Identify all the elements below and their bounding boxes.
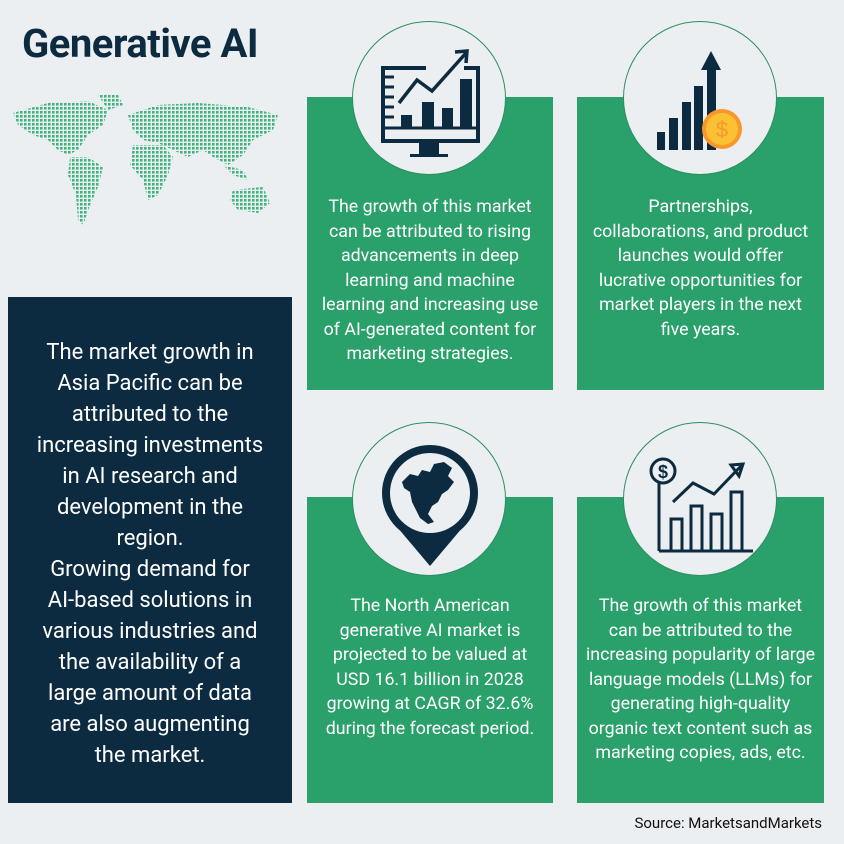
world map — [13, 95, 278, 225]
panel: partnerships: Partnerships, — [648, 196, 753, 217]
panel: LLMs: organic text content such as — [589, 718, 812, 738]
panel: deep learning: The growth of this market — [328, 196, 532, 217]
panel: deep learning: advancements in deep — [341, 245, 519, 266]
panel: North America: generative AI market is — [340, 620, 520, 640]
panel: deep learning: learning and increasing use — [322, 294, 538, 315]
panel: LLMs: marketing copies, ads, etc. — [595, 742, 806, 763]
panel: Asia Pacific: AI-based solutions in — [48, 588, 252, 613]
title: Generative AI — [22, 20, 258, 67]
panel: Asia Pacific: large amount of data — [48, 681, 252, 706]
panel: partnerships — [577, 97, 824, 390]
panel: partnerships: lucrative opportunities for — [599, 270, 802, 290]
icon: bars with coin — [623, 21, 777, 175]
panel: LLMs: generating high-quality — [611, 693, 790, 714]
panel: Asia Pacific: Growing demand for — [50, 557, 250, 582]
panel: Asia Pacific: attributed to the — [72, 402, 228, 427]
panel: LLMs: language models (LLMs) for — [589, 668, 812, 690]
panel: deep learning: learning and machine — [345, 270, 515, 290]
panel: North America: growing at CAGR of 32.6% — [327, 693, 533, 714]
panel: deep learning — [307, 97, 553, 390]
icon: dollar growth chart — [623, 422, 777, 576]
panel: North America: USD 16.1 billion in 2028 — [336, 668, 524, 690]
panel: deep learning: of AI-generated content for — [324, 318, 536, 340]
panel: North America: The North American — [350, 595, 510, 616]
panel: partnerships: five years. — [661, 318, 740, 340]
panel: Asia Pacific: The market growth in — [46, 340, 254, 365]
panel: Asia Pacific: in AI research and — [62, 464, 238, 489]
panel: LLMs: The growth of this market — [599, 595, 802, 616]
panel: Asia Pacific — [8, 297, 292, 803]
panel: LLMs — [577, 497, 824, 803]
panel: Asia Pacific: development in the — [57, 495, 243, 520]
panel: Asia Pacific: increasing investments — [37, 433, 263, 458]
panel: partnerships: market players in the next — [599, 294, 802, 315]
source: Source: MarketsandMarkets — [634, 814, 822, 832]
panel: Asia Pacific: the market. — [95, 743, 205, 768]
panel: partnerships: collaborations, and product — [593, 220, 808, 242]
icon: bars with coin: $ — [716, 117, 728, 142]
panel: Asia Pacific: region. — [116, 526, 184, 551]
panel: North America: projected to be valued at — [333, 644, 527, 665]
panel: Asia Pacific: Asia Pacific can be — [57, 371, 243, 396]
panel: Asia Pacific: various industries and — [42, 619, 258, 644]
panel: deep learning: marketing strategies. — [346, 343, 514, 364]
panel: LLMs: increasing popularity of large — [586, 644, 815, 665]
icon: location pin with map — [352, 422, 506, 576]
panel: North America — [307, 497, 553, 803]
panel: LLMs: can be attributed to the — [609, 620, 792, 640]
panel: North America: during the forecast period. — [326, 718, 534, 738]
panel: deep learning: can be attributed to rising — [329, 220, 531, 242]
panel: Asia Pacific: are also augmenting — [50, 712, 250, 737]
icon: monitor chart — [352, 21, 506, 175]
panel: partnerships: launches would offer — [618, 245, 783, 266]
panel: Asia Pacific: the availability of a — [59, 650, 241, 675]
icon: dollar growth chart: $ — [658, 462, 668, 482]
